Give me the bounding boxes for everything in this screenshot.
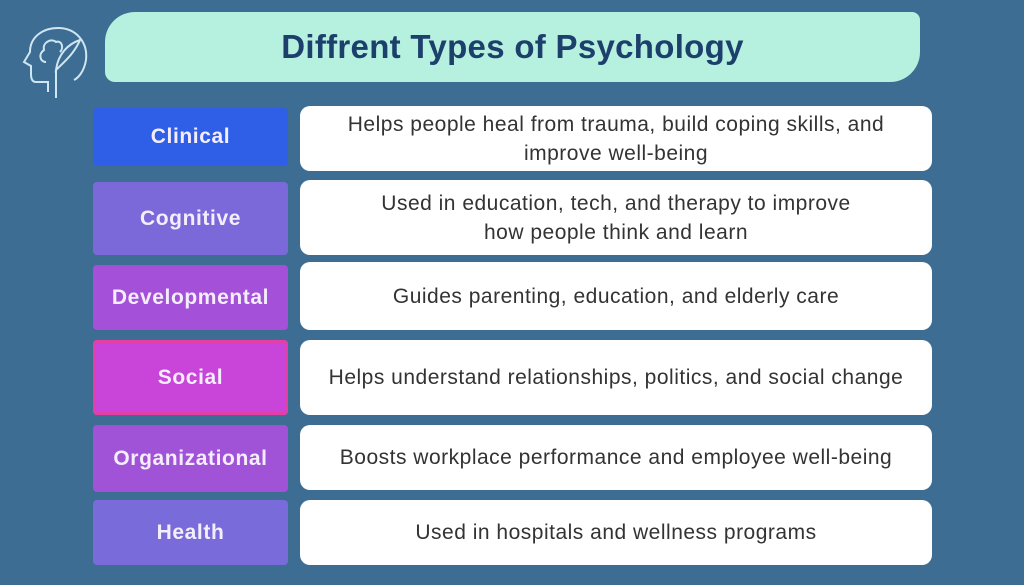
- row: clinical description: Helps people heal from trauma, build coping skills, and: [348, 112, 884, 136]
- row: social description: Helps understand relationships, politics, and social change: [329, 366, 903, 389]
- row: organizational description: Boosts workplace performance and employee well-being: [340, 446, 892, 469]
- row: organizational label: [93, 425, 288, 492]
- row: organizational description: [300, 425, 932, 490]
- row: cognitive label: Cognitive: [140, 206, 241, 230]
- row: clinical description: improve well-being: [524, 142, 708, 164]
- row: developmental description: Guides parenting, education, and elderly care: [393, 284, 839, 308]
- row: health description: Used in hospitals and wellness programs: [415, 521, 817, 544]
- row: cognitive label: [93, 182, 288, 255]
- row: developmental label: Developmental: [112, 286, 269, 308]
- row: social description: [300, 340, 932, 415]
- row: clinical label: [93, 108, 288, 166]
- row: cognitive description: [300, 180, 932, 255]
- row: clinical description: [300, 106, 932, 171]
- row: social label: Social: [158, 366, 223, 388]
- row: cognitive description: Used in education, tech, and therapy to improve: [381, 192, 851, 214]
- row: developmental label: [93, 265, 288, 330]
- row: cognitive description: how people think and learn: [484, 220, 748, 244]
- title banner: Diffrent Types of Psychology: [281, 28, 744, 65]
- row: developmental description: [300, 262, 932, 330]
- icon: head with leaf: [22, 27, 88, 98]
- row: health description: [300, 500, 932, 565]
- title banner: [105, 12, 920, 82]
- row: health label: [93, 500, 288, 565]
- row: organizational label: Organizational: [113, 446, 268, 470]
- row: social label: [93, 340, 288, 415]
- row: clinical label: Clinical: [151, 125, 230, 148]
- row: health label: Health: [157, 520, 224, 544]
